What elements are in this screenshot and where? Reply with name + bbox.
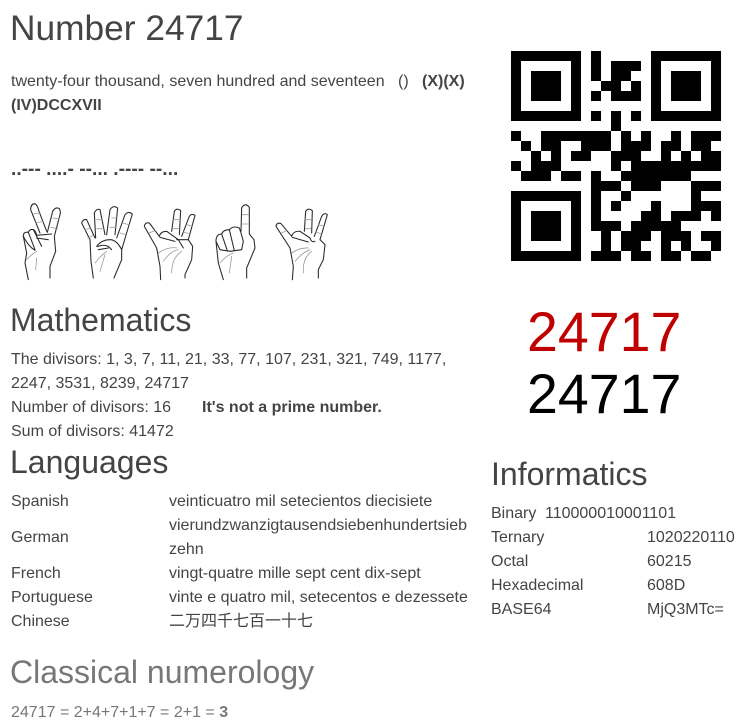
heading: informatics: Informatics: [491, 456, 647, 492]
text: sum of divisors: Sum of divisors: 41472: [11, 423, 174, 440]
row: Spanish: Spanish: [11, 493, 69, 510]
row: German: [11, 517, 467, 558]
row: base64: [491, 601, 724, 618]
icon: hand showing 1: [216, 205, 255, 280]
row: base64: BASE64: [491, 601, 551, 618]
icon: hand showing 7: [276, 209, 327, 280]
row: Portuguese: Portuguese: [11, 589, 93, 606]
row: ternary: Ternary: [491, 529, 544, 546]
QR code: [511, 51, 721, 261]
row: Portuguese: vinte e quatro mil, setecentos e dezessete: [169, 589, 468, 606]
heading: mathematics: Mathematics: [10, 302, 191, 338]
icon: hand showing 2: [23, 204, 60, 280]
row: Chinese: Chinese: [11, 613, 70, 630]
row: binary: Binary: [491, 505, 536, 522]
text: roman numeral continued: (IV)DCCXVII: [11, 97, 102, 114]
row: Portuguese: [11, 589, 468, 606]
row: hexadecimal: Hexadecimal: [491, 577, 583, 594]
row: ternary: [491, 529, 735, 546]
table: informatics: [491, 505, 735, 618]
text: divisors list: [11, 351, 446, 392]
row: hexadecimal: [491, 577, 685, 594]
text: numerology sum: 24717 = 2+4+7+1+7 = 2+1 = 3: [11, 704, 228, 721]
text: roman numeral: (X)(X): [422, 73, 465, 90]
row: hexadecimal: 608D: [647, 577, 685, 594]
text: number in words: twenty-four thousand, seven hundred and seventeen: [11, 73, 385, 90]
row: ternary: 1020220110: [647, 529, 735, 546]
heading: classical numerology: Classical numerology: [10, 654, 314, 690]
row: Chinese: 二万四千七百一十七: [169, 613, 313, 630]
row: base64: MjQ3MTc=: [647, 601, 724, 618]
text: number of divisors: Number of divisors: 16: [11, 399, 171, 416]
row: binary: 110000010001101: [545, 505, 676, 522]
text: divisors list: The divisors: 1, 3, 7, 11, 21, 33, 77, 107, 231, 321, 749, 1177,: [11, 351, 446, 368]
panel: sign language hands: [22, 203, 328, 280]
number in black: 24717: [527, 363, 681, 425]
row: octal: 60215: [647, 553, 692, 570]
row: German: vierundzwanzigtausendsiebenhundertsieb: [169, 517, 467, 534]
text: prime status: It's not a prime number.: [202, 399, 382, 416]
panel: number in words and roman numerals: [11, 73, 465, 114]
table: languages: [11, 493, 468, 630]
title: Number 24717: [10, 9, 244, 48]
row: octal: [491, 553, 692, 570]
row: German: zehn: [169, 541, 204, 558]
row: French: [11, 565, 421, 582]
text: empty parentheses: (): [398, 73, 409, 90]
icon: hand showing 4: [82, 207, 132, 278]
panel: mathematics facts: [11, 351, 446, 440]
heading: languages: Languages: [10, 444, 168, 480]
row: French: French: [11, 565, 61, 582]
row: Spanish: [11, 493, 432, 510]
number in red: 24717: [527, 301, 681, 363]
text: divisors list: 2247, 3531, 8239, 24717: [11, 375, 189, 392]
row: French: vingt-quatre mille sept cent dix-sept: [169, 565, 421, 582]
row: German: German: [11, 529, 69, 546]
row: Chinese: [11, 612, 313, 630]
icon: hand showing 7: [144, 209, 195, 280]
text: morse code: ..--- ....- --... .---- --...: [11, 159, 178, 180]
row: octal: Octal: [491, 553, 528, 570]
row: Spanish: veinticuatro mil setecientos diecisiete: [169, 493, 432, 510]
